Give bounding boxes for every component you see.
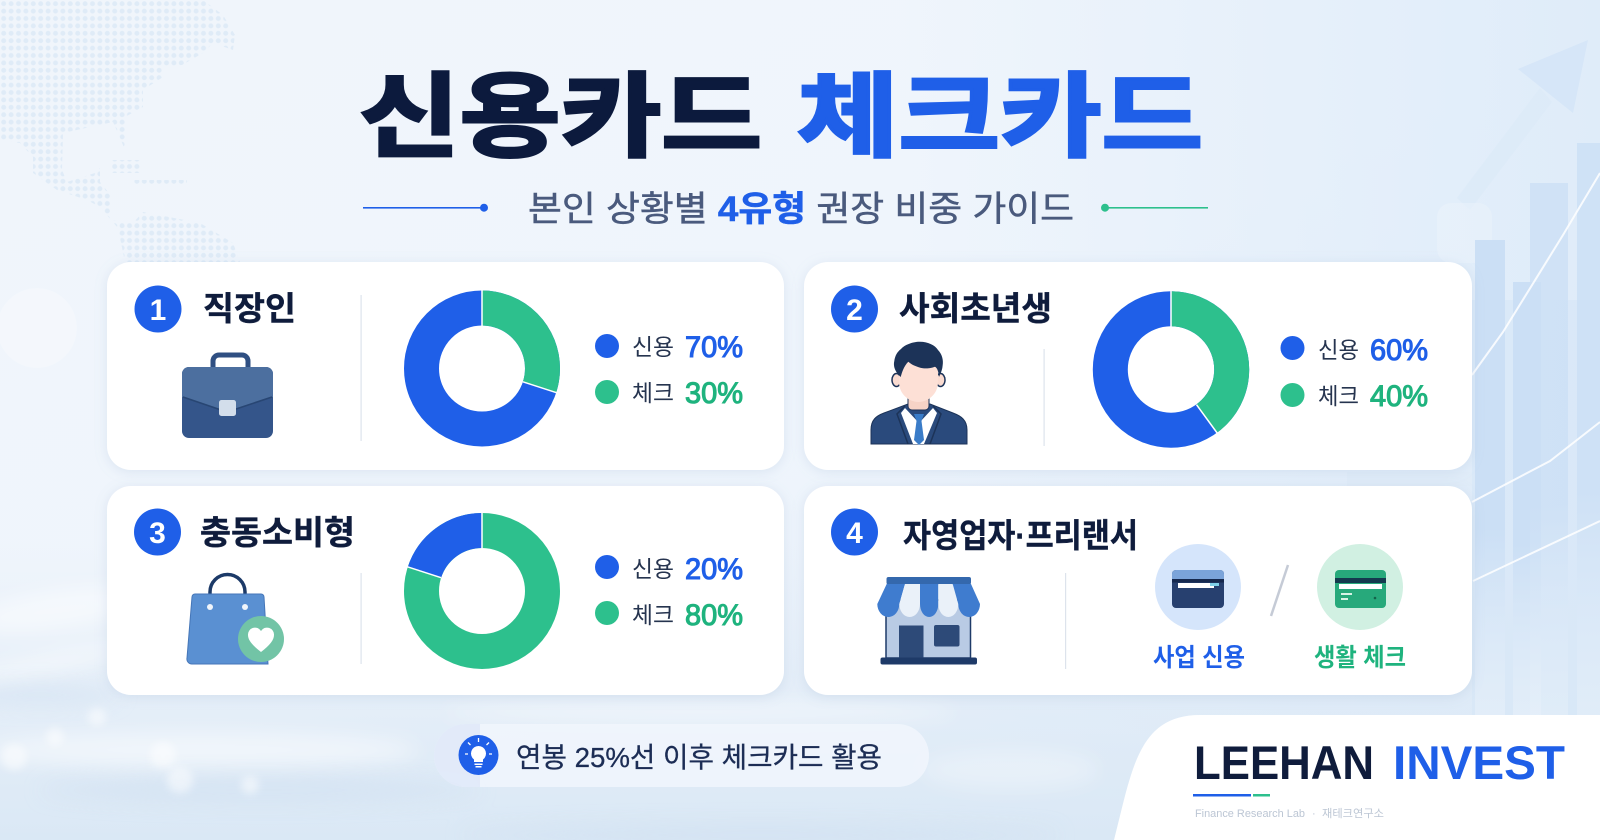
tagline bbox=[1195, 807, 1384, 820]
panel 2: 사회초년생 bbox=[804, 262, 1472, 470]
background: blurred wave and bokeh bbox=[0, 578, 1100, 840]
badge 1 bbox=[134, 286, 182, 332]
wordmark: INVEST bbox=[1393, 736, 1565, 789]
legend: 체크 bbox=[632, 602, 674, 628]
tagline: 재테크연구소 bbox=[1322, 807, 1384, 820]
donut separators bbox=[482, 290, 556, 393]
subtitle left rule bbox=[363, 204, 488, 212]
heading 자영업자·프리랜서: 자영업자·프리랜서 bbox=[903, 517, 1138, 554]
legend: 체크 bbox=[1318, 383, 1359, 409]
subtitle right rule bbox=[1101, 204, 1208, 212]
icon: briefcase bbox=[182, 355, 273, 438]
icon: light bulb bbox=[458, 735, 498, 775]
logo panel bbox=[1114, 715, 1600, 840]
title: 체크카드: 체크카드 bbox=[797, 67, 1203, 169]
icon: person in suit bbox=[871, 342, 967, 445]
donut separators bbox=[1171, 291, 1218, 434]
divider bbox=[360, 295, 362, 441]
tip pill bbox=[434, 724, 929, 787]
label 생활 체크: 생활 체크 bbox=[1314, 644, 1406, 672]
donut chart bbox=[1110, 309, 1232, 430]
legend: 40% bbox=[1370, 380, 1428, 413]
legend: 신용 bbox=[632, 556, 674, 582]
badge 1: 1 bbox=[150, 294, 166, 327]
legend: 30% bbox=[685, 377, 743, 410]
label 사업 신용: 사업 신용 bbox=[1153, 644, 1245, 672]
tagline: Finance Research Lab bbox=[1195, 808, 1305, 820]
title: 신용카드: 신용카드 bbox=[359, 67, 762, 169]
legend: 체크 bbox=[632, 380, 674, 406]
badge 4: 4 bbox=[846, 517, 863, 550]
panel 4: 자영업자·프리랜서 bbox=[804, 486, 1472, 695]
heading 충동소비형: 충동소비형 bbox=[200, 514, 355, 551]
background: trend lines bbox=[1472, 173, 1600, 581]
badge 3 bbox=[134, 508, 181, 556]
divider bbox=[1065, 573, 1066, 669]
donut separators bbox=[408, 512, 482, 578]
subtitle text: 본인 상황별 4유형 권장 비중 가이드 bbox=[528, 190, 1074, 229]
legend bbox=[595, 331, 743, 410]
legend: 60% bbox=[1370, 334, 1428, 367]
background: rising bars bbox=[1347, 40, 1600, 720]
tip text: 연봉 25%선 이후 체크카드 활용 bbox=[516, 742, 882, 773]
wordmark bbox=[1194, 736, 1565, 789]
legend bbox=[1280, 334, 1428, 413]
background: faint circle bbox=[0, 288, 77, 368]
icon: dark credit card bbox=[1172, 570, 1224, 608]
panel 3: 충동소비형 bbox=[107, 486, 784, 695]
debit option bbox=[1314, 544, 1406, 672]
icon: shopping bag with heart bbox=[187, 574, 284, 664]
title bbox=[359, 67, 1203, 169]
heading 사회초년생: 사회초년생 bbox=[899, 290, 1052, 327]
donut chart bbox=[422, 308, 542, 429]
panel 1: 직장인 bbox=[107, 262, 784, 470]
badge 2: 2 bbox=[846, 294, 863, 327]
tagline: · bbox=[1312, 808, 1316, 820]
background: dotted world map bbox=[0, 0, 250, 262]
divider bbox=[360, 573, 362, 664]
badge 3: 3 bbox=[149, 517, 166, 550]
badge 2 bbox=[831, 286, 878, 332]
icon: green debit card bbox=[1335, 570, 1386, 608]
legend: 70% bbox=[685, 331, 743, 364]
accent bars bbox=[1193, 794, 1270, 796]
subtitle bbox=[363, 190, 1208, 229]
legend: 신용 bbox=[632, 334, 674, 360]
legend: 20% bbox=[685, 553, 743, 586]
wordmark: LEEHAN bbox=[1194, 736, 1374, 789]
heading 직장인: 직장인 bbox=[203, 290, 296, 327]
legend: 80% bbox=[685, 599, 743, 632]
legend bbox=[595, 553, 743, 632]
icon: storefront bbox=[877, 577, 980, 664]
donut chart bbox=[422, 530, 542, 652]
slash separator bbox=[1271, 565, 1288, 616]
divider bbox=[1044, 349, 1045, 446]
legend: 신용 bbox=[1318, 337, 1359, 363]
credit option bbox=[1153, 544, 1245, 672]
badge 4 bbox=[831, 508, 878, 556]
